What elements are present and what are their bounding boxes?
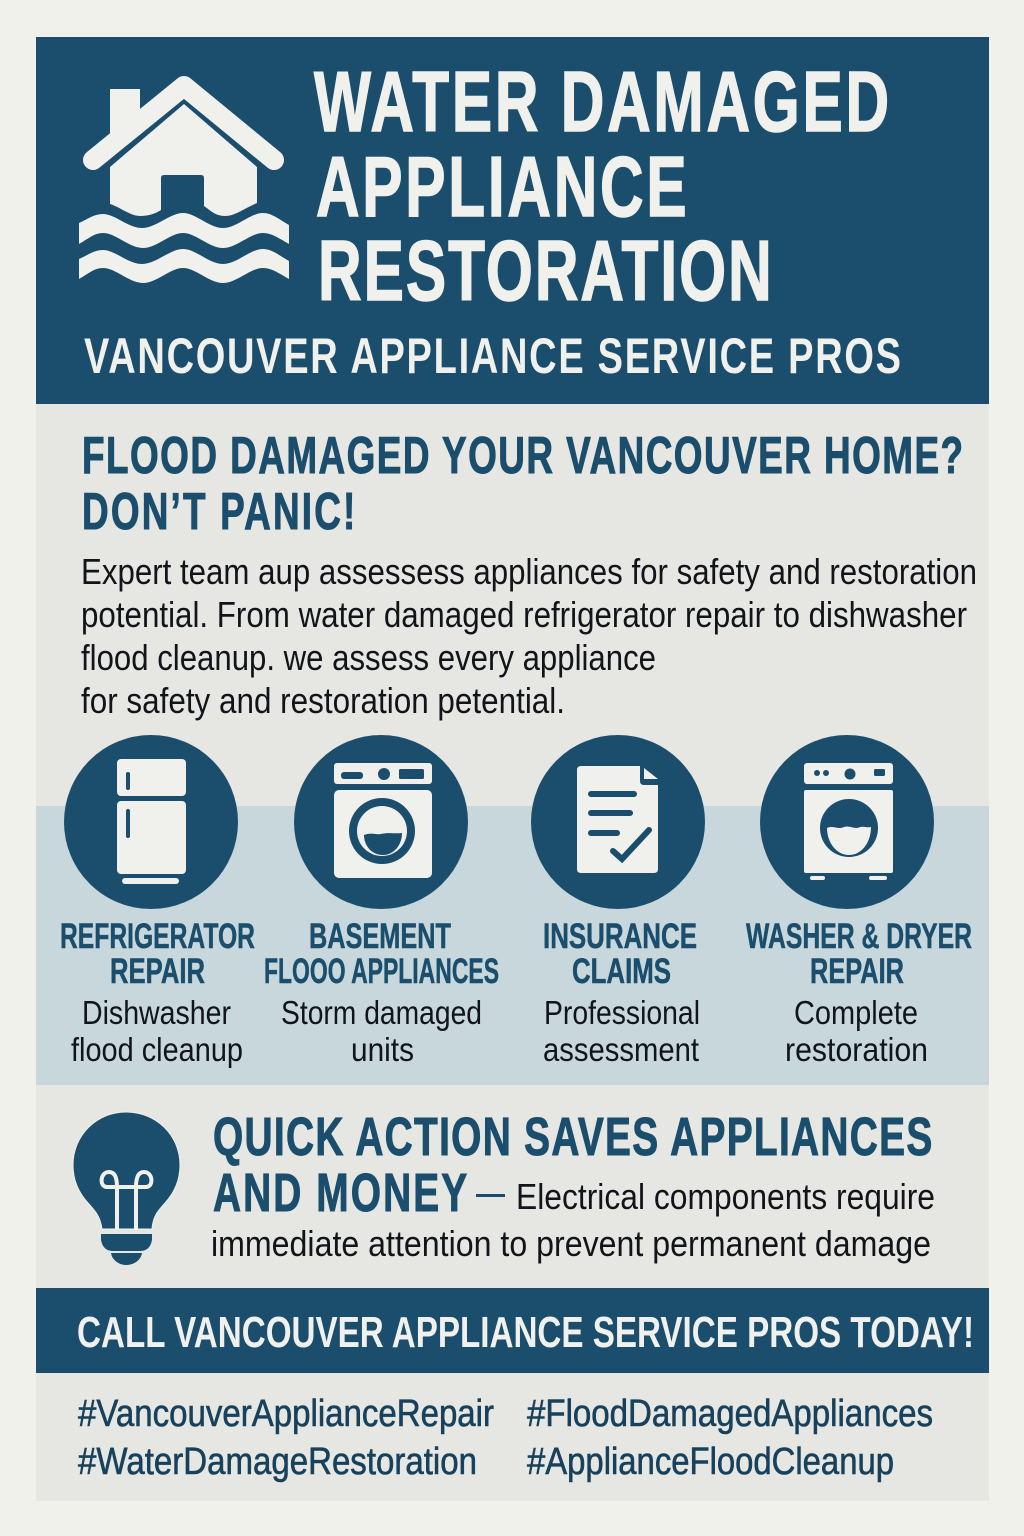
label: refrigerator repair [60, 917, 255, 1068]
panel: body background [36, 404, 989, 1501]
title: APPLIANCE [316, 139, 687, 234]
label: insurance claims [543, 917, 700, 1068]
label: basement flood appliances: units [351, 1031, 414, 1068]
label: washer and dryer repair: restoration [785, 1031, 928, 1068]
hashtags: #FloodDamagedAppliances [527, 1393, 933, 1435]
title: RESTORATION [318, 223, 772, 318]
label: washer and dryer repair [746, 917, 972, 1068]
callout: quick action: QUICK ACTION SAVES APPLIANCES [213, 1106, 932, 1166]
label: insurance claims: INSURANCE [543, 917, 697, 956]
text block: intro paragraph: for safety and restoration petential. [81, 680, 565, 721]
label: washer and dryer repair: REPAIR [810, 952, 904, 991]
heading: flood damaged [82, 426, 963, 541]
icon: washer and dryer [760, 735, 934, 909]
label: refrigerator repair: flood cleanup [71, 1031, 243, 1068]
hashtags: #ApplianceFloodCleanup [527, 1441, 894, 1483]
label: refrigerator repair: Dishwasher [82, 994, 231, 1031]
banner: call to action [36, 1288, 989, 1373]
hashtags: #VancouverApplianceRepair [78, 1393, 494, 1435]
label: washer and dryer repair: Complete [794, 994, 918, 1031]
heading: flood damaged: DON’T PANIC! [82, 482, 355, 541]
text block: intro paragraph: flood cleanup. we assess every appliance [81, 637, 656, 678]
subtitle: VANCOUVER APPLIANCE SERVICE PROS [84, 329, 901, 384]
callout: quick action [211, 1106, 935, 1264]
panel: header [36, 37, 989, 404]
icon: insurance document [531, 735, 705, 909]
hashtags [78, 1393, 933, 1483]
icon: flooded house [79, 86, 289, 283]
callout: quick action: AND MONEY [213, 1162, 467, 1222]
icon: light bulb [73, 1112, 180, 1265]
label: refrigerator repair: REFRIGERATOR [60, 917, 255, 956]
label: insurance claims: Professional [544, 994, 700, 1031]
label: refrigerator repair: REPAIR [110, 952, 205, 991]
icon: front-load washer [294, 735, 468, 909]
panel: services band [36, 806, 989, 1085]
label: basement flood appliances: FLOOO APPLIANCES [264, 952, 499, 991]
callout: quick action: immediate attention to prevent permanent damage [211, 1223, 931, 1264]
label: basement flood appliances: Storm damaged [281, 994, 482, 1031]
callout: quick action: Electrical components require [516, 1176, 935, 1217]
title: WATER DAMAGED [314, 54, 889, 149]
title [314, 54, 889, 318]
hashtags: #WaterDamageRestoration [78, 1441, 477, 1483]
text block: intro paragraph [81, 551, 977, 721]
icon: refrigerator [64, 735, 238, 909]
label: insurance claims: assessment [543, 1031, 699, 1068]
label: insurance claims: CLAIMS [572, 952, 671, 991]
label: basement flood appliances: BASEMENT [309, 917, 451, 956]
label: basement flood appliances [264, 917, 499, 1068]
heading: flood damaged: FLOOD DAMAGED YOUR VANCOUVER HOME? [82, 426, 963, 485]
